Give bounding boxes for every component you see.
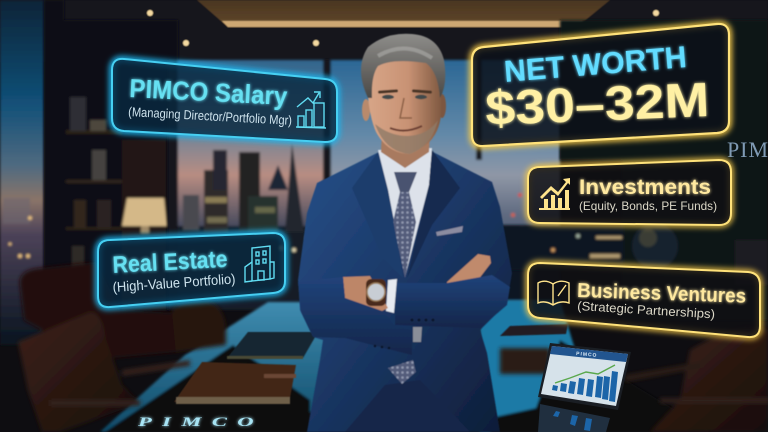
heading: Business Ventures: Business Ventures — [577, 280, 746, 308]
folios on table — [174, 324, 568, 404]
tablet with chart: PIMCO — [576, 351, 598, 359]
subheading: asset classes: (Equity, Bonds, PE Funds) — [579, 199, 717, 213]
forearm sleeve — [395, 275, 510, 328]
head — [361, 34, 446, 154]
heading: Real Estate: Real Estate — [112, 246, 228, 279]
table lettering: PIMCO: PIMCO — [138, 414, 264, 429]
shirt collar — [378, 148, 432, 277]
figure: $30–32M: $30–32M — [484, 74, 710, 136]
lapels — [352, 152, 403, 278]
icon: open book — [538, 281, 569, 305]
upper hand — [447, 254, 491, 285]
panel: Business Ventures — [528, 263, 760, 337]
shirt cuff — [386, 279, 397, 313]
wall lettering: PIMCO: PIM — [727, 137, 768, 162]
icon: office building — [245, 246, 274, 282]
tie — [388, 172, 417, 384]
panel: PIMCO Salary — [112, 59, 337, 142]
wristwatch — [366, 279, 386, 306]
icon: growth chart — [539, 178, 570, 210]
right wall — [496, 20, 768, 320]
leather chairs — [18, 262, 768, 432]
subheading: portfolio: (High-Value Portfolio) — [112, 270, 236, 295]
panel: Net Worth — [472, 24, 729, 146]
jacket — [298, 152, 512, 432]
panel: Real Estate — [98, 233, 285, 307]
pocket square — [436, 226, 463, 236]
left window with city — [0, 0, 44, 345]
lower forearm sleeve — [298, 277, 412, 355]
heading: Investments: Investments — [579, 176, 711, 199]
heading: NET WORTH: NET WORTH — [503, 39, 688, 89]
subheading: role: (Managing Director/Portfolio Mgr) — [128, 104, 292, 128]
heading: PIMCO Salary: PIMCO Salary — [129, 73, 289, 111]
man in navy suit — [298, 34, 512, 432]
bookcase — [44, 0, 178, 310]
ceiling — [0, 0, 768, 62]
neck — [381, 130, 430, 168]
tablet with chart — [538, 343, 631, 432]
icon: rising chart with building — [296, 92, 326, 128]
central windows with skyline — [168, 60, 560, 310]
subheading: partnerships: (Strategic Partnerships) — [577, 299, 715, 321]
lower hand — [343, 276, 388, 312]
panel: Investments — [528, 160, 731, 225]
conference table — [100, 300, 712, 432]
trousers — [345, 380, 470, 432]
